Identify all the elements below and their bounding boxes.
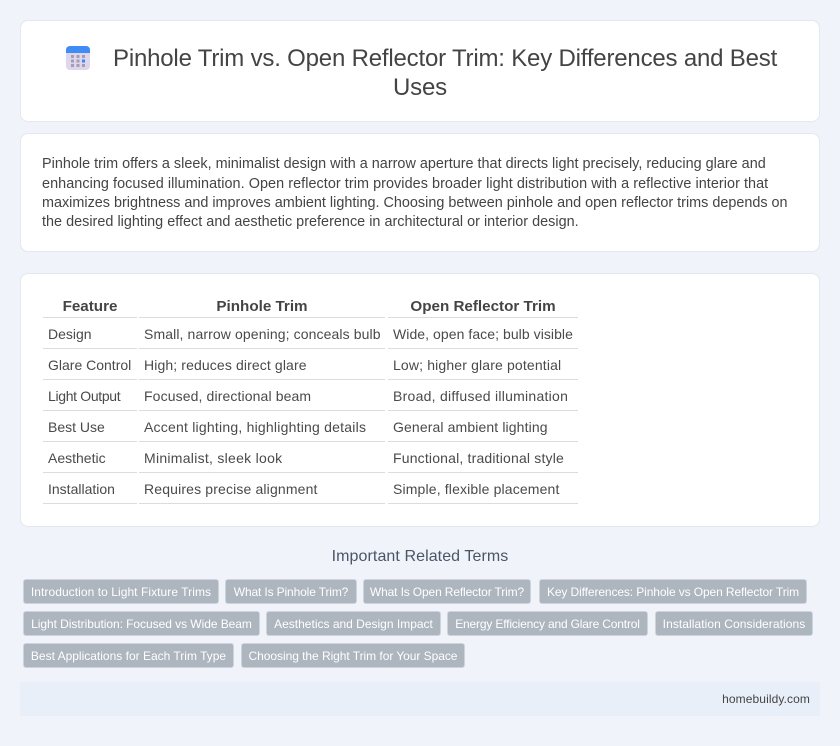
row: Design: [43, 326, 578, 349]
intro paragraph: Pinhole trim offers a sleek, minimalist design with a narrow aperture that directs light precisely, reducing glare and: [42, 156, 766, 172]
tag list: Introduction to Light Fixture Trims: [31, 585, 211, 599]
row: Aesthetic: Minimalist, sleek look: [144, 450, 282, 466]
row: Glare Control: Low; higher glare potential: [393, 357, 561, 373]
tag list: What Is Pinhole Trim?: [234, 585, 348, 599]
intro paragraph: enhancing focused illumination. Open reflector trim provides broader light distribution with a reflective interior that: [42, 176, 768, 192]
intro paragraph: maximizes brightness and improves ambient lighting. Choosing between pinhole and open reflector trims depends on: [42, 195, 788, 211]
row: Light Output: Focused, directional beam: [144, 388, 311, 404]
row: Aesthetic: Aesthetic: [48, 450, 106, 466]
row: Glare Control: High; reduces direct glare: [144, 357, 307, 373]
tag list: [23, 579, 813, 668]
row: Installation: Simple, flexible placement: [393, 481, 560, 497]
row: Design: Small, narrow opening; conceals bulb: [144, 326, 381, 342]
row: Installation: Installation: [48, 481, 115, 497]
table header: Feature: [63, 298, 117, 315]
footer credit: homebuildy.com: [722, 692, 810, 706]
table header: Pinhole Trim: [216, 298, 308, 315]
row: Best Use: General ambient lighting: [393, 419, 548, 435]
row: Glare Control: [43, 357, 578, 380]
tag list: Light Distribution: Focused vs Wide Beam: [31, 617, 252, 631]
row: Design: Wide, open face; bulb visible: [393, 326, 573, 342]
row: Design: Design: [48, 326, 92, 342]
tag list: Energy Efficiency and Glare Control: [455, 617, 640, 631]
title: Uses: [393, 74, 447, 101]
row: Installation: [43, 481, 578, 504]
row: Light Output: Light Output: [48, 388, 120, 404]
intro paragraph: the desired lighting effect and aesthetic preference in architectural or interior design.: [42, 214, 579, 230]
row: Light Output: [43, 388, 578, 411]
row: Best Use: [43, 419, 578, 442]
row: Aesthetic: [43, 450, 578, 473]
panel: comparison table: [20, 273, 820, 527]
table header: Open Reflector Trim: [410, 298, 556, 315]
heading: related terms: Important Related Terms: [332, 548, 508, 565]
tag list: Key Differences: Pinhole vs Open Reflector Trim: [547, 585, 799, 599]
footer: [20, 682, 820, 716]
tag list: Best Applications for Each Trim Type: [31, 649, 226, 663]
row: Glare Control: Glare Control: [48, 357, 131, 373]
row: Light Output: Broad, diffused illumination: [393, 388, 568, 404]
tag list: Aesthetics and Design Impact: [274, 617, 433, 631]
row: Best Use: Best Use: [48, 419, 105, 435]
tag list: Choosing the Right Trim for Your Space: [249, 649, 457, 663]
icon: calendar: [66, 46, 90, 70]
row: Aesthetic: Functional, traditional style: [393, 450, 564, 466]
tag list: What Is Open Reflector Trim?: [370, 585, 524, 599]
row: Best Use: Accent lighting, highlighting details: [144, 419, 366, 435]
title: Pinhole Trim vs. Open Reflector Trim: Key Differences and Best: [113, 45, 777, 72]
tag list: Installation Considerations: [663, 617, 805, 631]
intro paragraph: [42, 156, 788, 230]
header panel: [20, 20, 820, 122]
panel: intro text: [20, 133, 820, 252]
table header: [43, 298, 578, 318]
title: [113, 45, 778, 101]
row: Installation: Requires precise alignment: [144, 481, 318, 497]
